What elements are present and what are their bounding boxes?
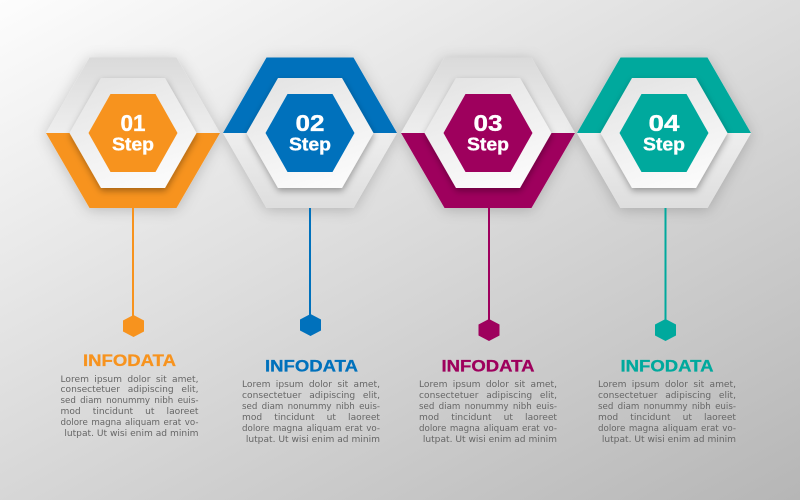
step 2 hexagon: 02	[295, 110, 325, 136]
heading 2: INFODATA	[265, 356, 358, 376]
step 3 hexagon: 03	[473, 110, 503, 136]
text block 3: lutpat. Ut wisi enim ad minim	[423, 435, 557, 445]
step 3 hexagon	[401, 58, 575, 208]
heading 1: INFODATA	[83, 351, 176, 370]
text block 1: sed diam nonummy nibh euis-	[60, 396, 198, 406]
step 4 hexagon: Step	[643, 134, 685, 154]
text block 3: sed diam nonummy nibh euis-	[419, 402, 557, 412]
connector and marker 1	[123, 208, 144, 337]
step 4 hexagon: 04	[648, 110, 680, 136]
step 2 hexagon	[223, 58, 397, 208]
text block 2: Lorem ipsum dolor sit amet,	[242, 380, 380, 390]
text block 2	[242, 380, 380, 445]
step 2 hexagon: Step	[289, 134, 331, 154]
text block 1: Lorem ipsum dolor sit amet,	[60, 375, 198, 385]
text block 1: mod tincidunt ut laoreet	[60, 407, 198, 417]
text block 1	[60, 375, 198, 439]
text block 2: lutpat. Ut wisi enim ad minim	[246, 435, 380, 445]
text block 4: lutpat. Ut wisi enim ad minim	[602, 435, 736, 445]
heading 3: INFODATA	[442, 356, 534, 376]
text block 2: mod tincidunt ut laoreet	[242, 413, 380, 423]
text block 3	[419, 380, 557, 445]
text block 4: consectetuer adipiscing elit,	[598, 391, 736, 401]
text block 3: Lorem ipsum dolor sit amet,	[419, 380, 557, 390]
step 1 hexagon: Step	[112, 134, 154, 154]
connector and marker 4	[655, 208, 676, 341]
text block 4: mod tincidunt ut laoreet	[598, 413, 736, 423]
text block 2: dolore magna aliquam erat vo-	[242, 424, 380, 434]
text block 1: lutpat. Ut wisi enim ad minim	[64, 429, 198, 439]
text block 2: sed diam nonummy nibh euis-	[242, 402, 380, 412]
heading 4: INFODATA	[620, 356, 714, 376]
text block 4: sed diam nonummy nibh euis-	[598, 402, 736, 412]
text block 2: consectetuer adipiscing elit,	[242, 391, 380, 401]
text block 1: consectetuer adipiscing elit,	[60, 385, 198, 395]
connector and marker 2	[300, 208, 321, 336]
text block 3: dolore magna aliquam erat vo-	[419, 424, 557, 434]
step 4 hexagon	[577, 58, 751, 208]
step 3 hexagon: Step	[467, 134, 509, 154]
text block 3: mod tincidunt ut laoreet	[419, 413, 557, 423]
text block 1: dolore magna aliquam erat vo-	[60, 418, 198, 428]
text block 4: dolore magna aliquam erat vo-	[598, 424, 736, 434]
text block 4: Lorem ipsum dolor sit amet,	[598, 380, 736, 390]
step 1 hexagon: 01	[120, 110, 146, 136]
text block 4	[598, 380, 736, 445]
text block 3: consectetuer adipiscing elit,	[419, 391, 557, 401]
connector and marker 3	[478, 208, 500, 341]
step 1 hexagon	[46, 58, 220, 208]
